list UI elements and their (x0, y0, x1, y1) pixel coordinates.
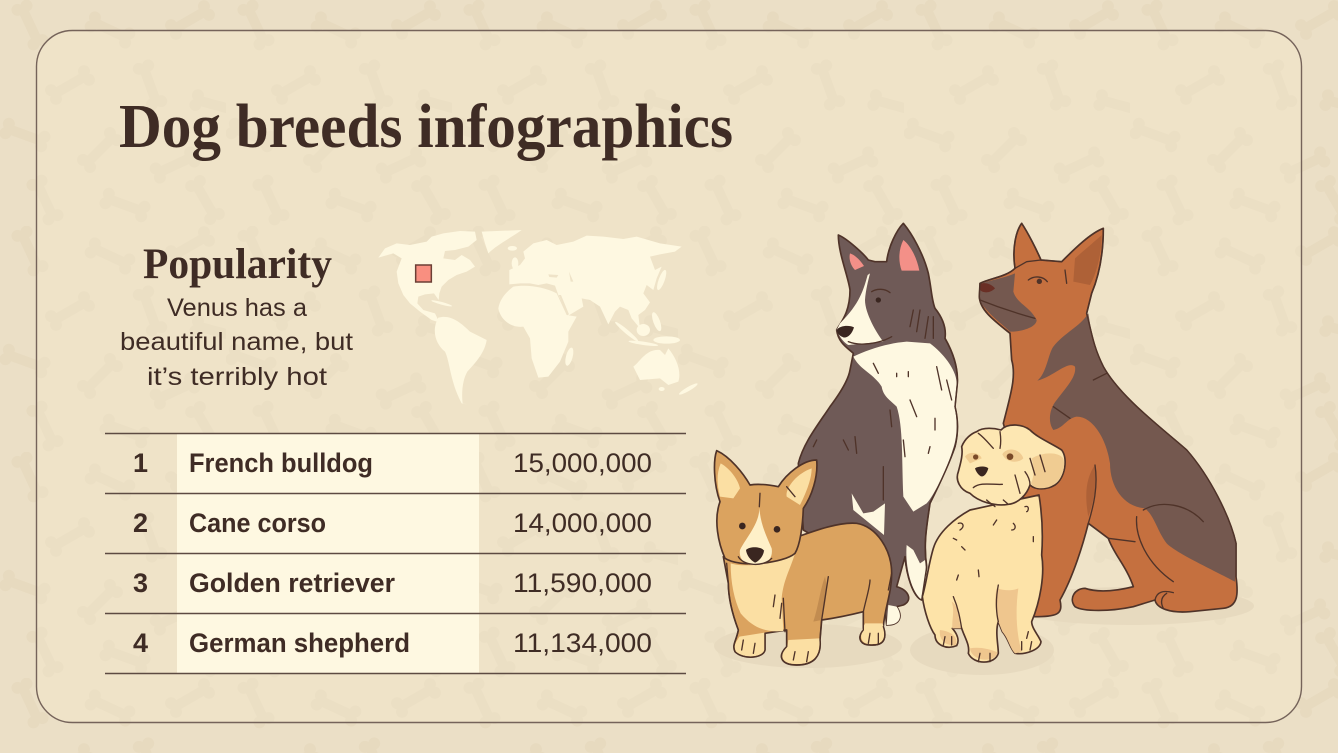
row 3: 3 (133, 568, 148, 598)
dog: German shepherd (979, 223, 1237, 617)
row 3: Golden retriever (189, 568, 395, 598)
row 1: 1 (133, 448, 148, 478)
row 2: Cane corso (189, 508, 326, 538)
map: Australia (633, 348, 679, 385)
text block: popularity description: beautiful name, but (120, 328, 353, 356)
map: islands (431, 246, 699, 396)
row 2: 2 (133, 508, 148, 538)
row 4 (133, 628, 652, 658)
row 4: German shepherd (189, 628, 410, 658)
map marker (416, 265, 431, 282)
row 3: 11,590,000 (513, 568, 652, 598)
dog: poodle (922, 425, 1065, 662)
row 1: 15,000,000 (513, 448, 652, 478)
map: Eurasia (509, 236, 682, 328)
table: breeds popularity (105, 433, 686, 674)
world map (378, 230, 699, 404)
row 1: French bulldog (189, 448, 373, 478)
text block: popularity description: Venus has a (167, 294, 307, 322)
map: Africa (498, 286, 577, 378)
map: Greenland (482, 230, 522, 253)
text block: popularity description (120, 294, 353, 391)
dog: border collie (798, 223, 957, 625)
heading: popularity: Popularity (143, 241, 332, 288)
table highlight column (177, 433, 479, 674)
row 3 (133, 568, 652, 598)
dog: corgi (714, 451, 892, 665)
row 4: 4 (133, 628, 148, 658)
map: South America (435, 317, 487, 404)
row 2 (133, 508, 652, 538)
row 1 (133, 448, 652, 478)
map: North America (378, 231, 477, 322)
row 4: 11,134,000 (513, 628, 652, 658)
illustration: dogs (714, 223, 1254, 675)
ground shadows (714, 587, 1254, 675)
text block: popularity description: it’s terribly hot (147, 363, 327, 391)
row 2: 14,000,000 (513, 508, 652, 538)
title: Dog breeds infographics (119, 93, 733, 161)
